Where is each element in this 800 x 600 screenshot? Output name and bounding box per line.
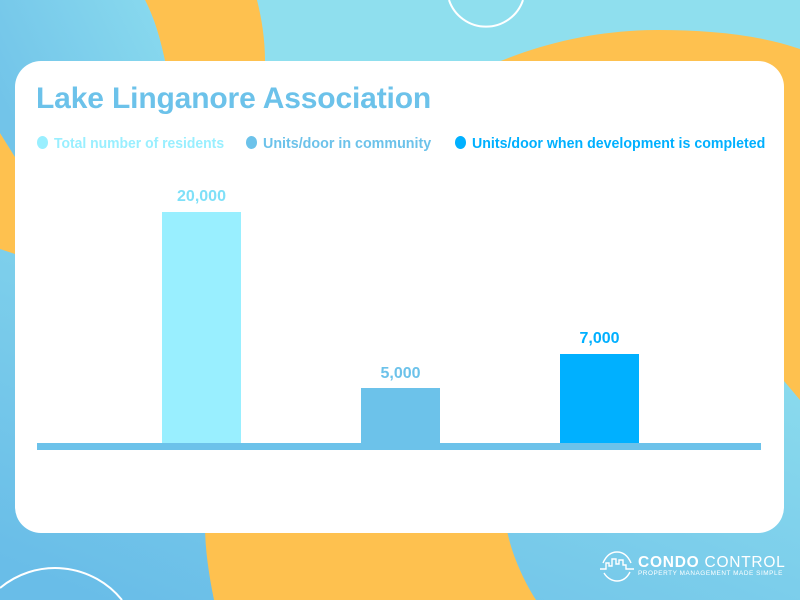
- bar chart: [37, 188, 761, 450]
- legend dot: units when completed: [455, 136, 466, 149]
- decorative circle outline bottom: [0, 568, 122, 600]
- logo: Condo Control: [600, 551, 786, 582]
- legend dot: units in community: [246, 136, 257, 149]
- legend label: units in community: Units/door in community: [263, 135, 431, 152]
- legend label: units when completed: Units/door when development is completed: [472, 135, 765, 152]
- chart baseline: [37, 443, 761, 450]
- title: Lake Linganore Association: [36, 82, 431, 115]
- value label: 5,000: 5,000: [380, 365, 421, 382]
- bar: residents: [162, 212, 241, 443]
- legend label: residents: Total number of residents: [54, 135, 224, 152]
- bar: units when completed: [560, 354, 639, 443]
- value label: 7,000: 7,000: [579, 330, 620, 347]
- legend dot: residents: [37, 136, 48, 149]
- icon: city skyline in circular arrows: [600, 551, 634, 582]
- decorative circle outline top: [449, 0, 523, 27]
- legend: [37, 135, 765, 152]
- value label: 20,000: 20,000: [177, 188, 226, 205]
- bar: units in community: [361, 388, 440, 443]
- panel: white card: [15, 61, 784, 533]
- logo name: CONDO CONTROL: [638, 554, 786, 571]
- logo tagline: PROPERTY MANAGEMENT MADE SIMPLE: [638, 570, 783, 577]
